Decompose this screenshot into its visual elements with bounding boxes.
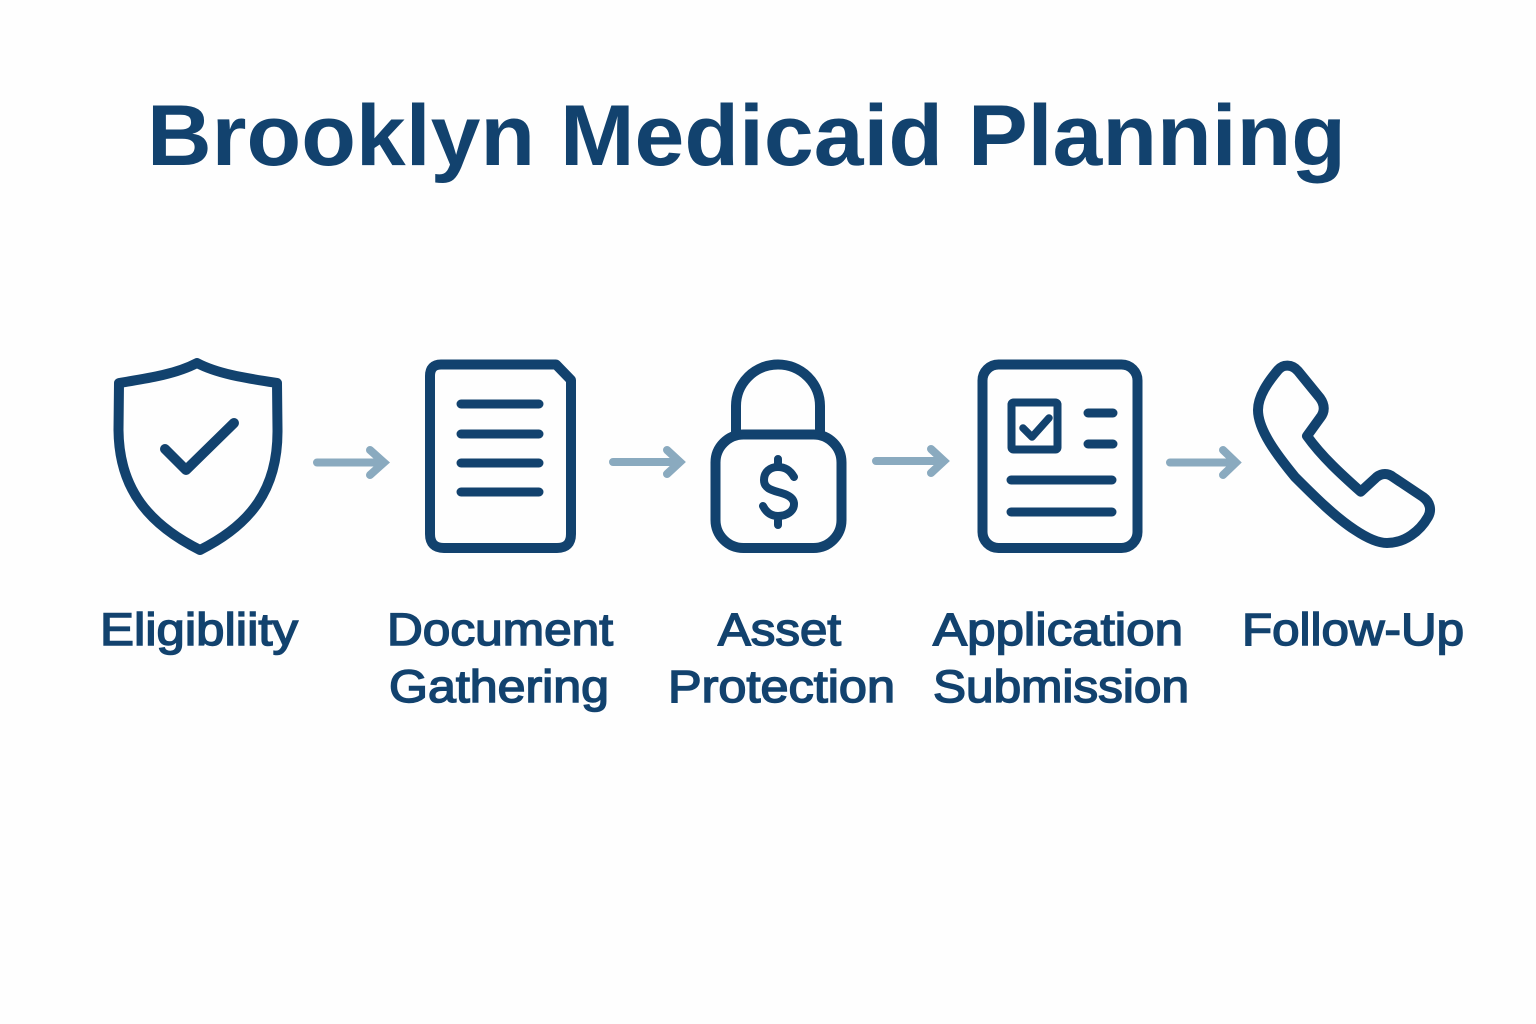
title: Brooklyn Medicaid Planning (147, 88, 1346, 184)
label: asset protection: Asset (718, 604, 842, 655)
icon: padlock with dollar sign (716, 364, 842, 548)
arrow: document gathering to asset protection (613, 450, 680, 474)
icon: shield with check (118, 363, 278, 550)
icon: telephone handset (1258, 366, 1430, 543)
label: document gathering (387, 604, 614, 712)
arrow: asset protection to application submission (876, 449, 944, 473)
label: document gathering: Gathering (389, 661, 609, 712)
icon: application form with checkbox (982, 364, 1138, 548)
label: application submission: Application (933, 604, 1183, 655)
arrow: eligibility to document gathering (317, 450, 384, 475)
label: document gathering: Document (387, 604, 614, 655)
label: application submission: Submission (933, 661, 1189, 712)
step 3: asset protection (668, 364, 895, 712)
step 4: application submission (933, 364, 1189, 712)
label: eligibility: Eligibliity (100, 604, 299, 655)
label: application submission (933, 604, 1189, 712)
icon: document (430, 364, 571, 548)
label: asset protection (668, 604, 895, 712)
step 5: follow-up (1242, 366, 1464, 655)
step 1: eligibility (100, 363, 299, 655)
label: follow-up: Follow-Up (1242, 604, 1464, 655)
arrow: application submission to follow-up (1170, 450, 1236, 475)
label: asset protection: Protection (668, 661, 895, 712)
step 2: document gathering (387, 364, 614, 712)
